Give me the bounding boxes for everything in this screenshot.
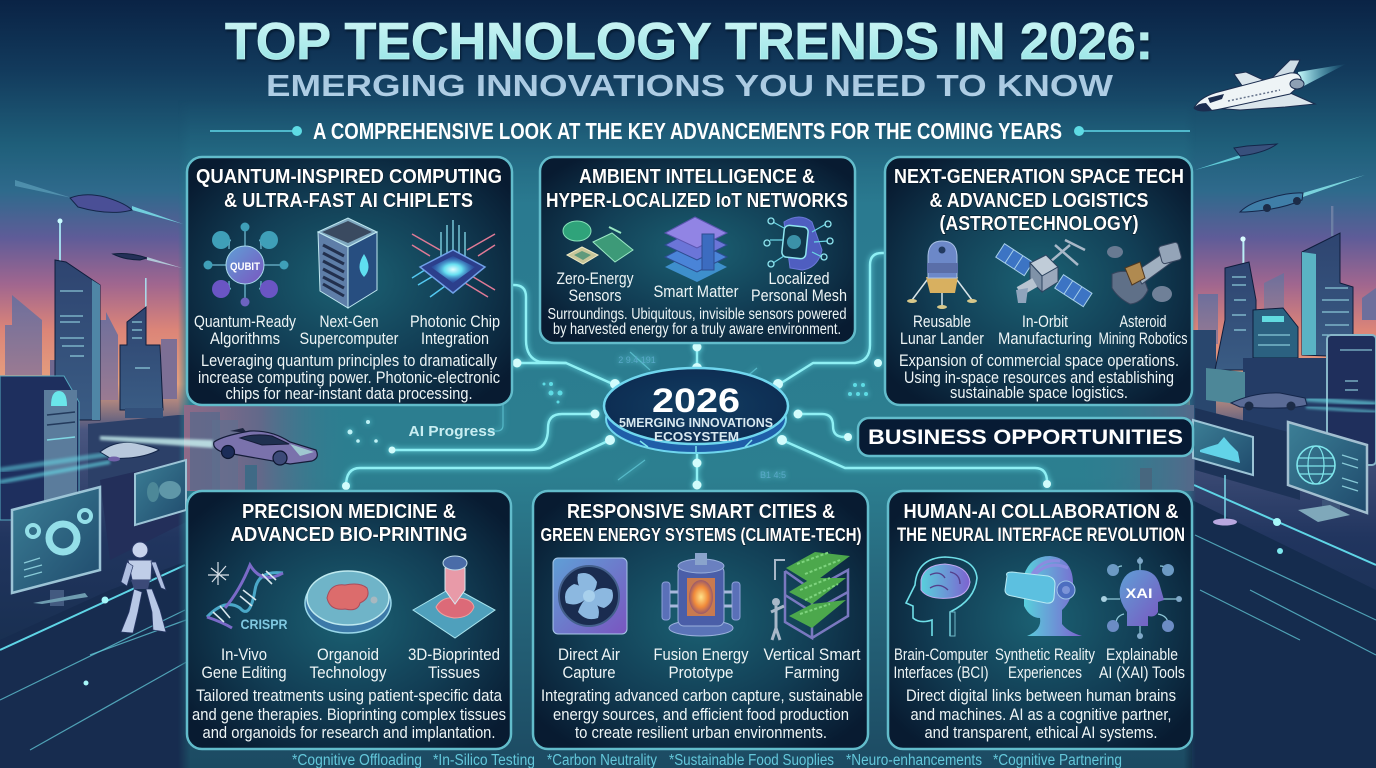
description bbox=[548, 306, 846, 338]
heading: QUANTUM-INSPIRED COMPUTING bbox=[196, 165, 502, 188]
heading: & ADVANCED LOGISTICS bbox=[930, 189, 1148, 212]
city glimpse between left panels bbox=[184, 405, 354, 491]
icon labels bbox=[194, 313, 500, 348]
icon labels: Experiences bbox=[1008, 664, 1082, 682]
description: Direct digital links between human brains bbox=[906, 687, 1176, 705]
description: and transparent, ethical AI systems. bbox=[924, 724, 1158, 742]
heading: RESPONSIVE SMART CITIES & bbox=[567, 500, 835, 523]
flying car left bbox=[15, 180, 183, 224]
business opportunities banner bbox=[858, 418, 1193, 456]
monitor with gears bbox=[12, 487, 100, 606]
heading bbox=[196, 165, 502, 212]
icon labels: Reusable bbox=[913, 313, 971, 331]
description bbox=[899, 352, 1179, 402]
title line 1: TOP TECHNOLOGY TRENDS IN 2026: bbox=[225, 13, 1153, 71]
icon: DNA CRISPR bbox=[207, 562, 288, 632]
icon: qubit network bbox=[204, 222, 288, 306]
icon labels bbox=[894, 646, 1185, 682]
panel: smart cities bbox=[533, 491, 868, 749]
central hub bbox=[604, 368, 788, 453]
description bbox=[192, 687, 506, 742]
small ship left bbox=[113, 254, 182, 268]
icon: asteroid mining robot bbox=[1107, 242, 1182, 304]
description: Expansion of commercial space operations. bbox=[899, 352, 1179, 370]
heading bbox=[546, 165, 848, 212]
heading bbox=[540, 500, 862, 545]
heading: GREEN ENERGY SYSTEMS (CLIMATE-TECH) bbox=[540, 525, 862, 545]
icon labels: Localized bbox=[768, 270, 830, 288]
description: Integrating advanced carbon capture, sustainable bbox=[541, 687, 863, 705]
icon labels: Zero-Energy bbox=[556, 270, 634, 288]
description: sustainable space logistics. bbox=[950, 384, 1128, 402]
icon labels: Tissues bbox=[428, 664, 480, 682]
hover car left bbox=[100, 442, 159, 462]
icon labels bbox=[202, 646, 500, 682]
tagline with connector dots: A COMPREHENSIVE LOOK AT THE KEY ADVANCEMENTS FOR THE COMING YEARS bbox=[313, 118, 1062, 144]
icon labels bbox=[558, 646, 861, 682]
icon: VR headset bbox=[1005, 556, 1082, 636]
description: by harvested energy for a truly aware environment. bbox=[553, 321, 841, 338]
flying ship right bbox=[1195, 144, 1277, 170]
description bbox=[541, 687, 863, 742]
icon: brain-computer interface bbox=[906, 557, 977, 636]
icon: in-orbit manufacturing bbox=[996, 240, 1092, 307]
circuit traces bbox=[342, 253, 1051, 490]
hub caption line 2: ECOSYSTEM bbox=[654, 429, 739, 444]
icon labels: Farming bbox=[784, 664, 840, 682]
circuit traces: B1 4:5 bbox=[760, 470, 786, 480]
icon labels: Capture bbox=[562, 664, 616, 682]
circuit traces: 2 9.4 191 bbox=[618, 355, 656, 365]
icon labels: Lunar Lander bbox=[900, 330, 984, 348]
icon labels bbox=[556, 270, 847, 305]
icon labels: Interfaces (BCI) bbox=[894, 664, 988, 682]
heading: ADVANCED BIO-PRINTING bbox=[230, 523, 468, 546]
title bbox=[225, 13, 1153, 103]
icon labels: Brain-Computer bbox=[894, 646, 988, 664]
icon labels: Gene Editing bbox=[202, 664, 286, 682]
heading: THE NEURAL INTERFACE REVOLUTION bbox=[897, 525, 1185, 546]
icon: explainable AI: XAI bbox=[1126, 585, 1152, 601]
icon: photonic chip bbox=[412, 220, 495, 297]
icon: vertical farming bbox=[771, 552, 850, 640]
description: to create resilient urban environments. bbox=[575, 724, 827, 742]
icon labels: Asteroid bbox=[1120, 313, 1166, 331]
heading: (ASTROTECHNOLOGY) bbox=[940, 212, 1138, 235]
icon: explainable AI bbox=[1101, 557, 1182, 639]
icon labels: Mining Robotics bbox=[1098, 330, 1188, 348]
heading bbox=[897, 500, 1185, 546]
heading: HUMAN-AI COLLABORATION & bbox=[904, 500, 1179, 523]
monitor small left bbox=[135, 460, 186, 525]
center teal field bbox=[178, 100, 1196, 768]
icon labels: Technology bbox=[310, 664, 387, 682]
icon labels: Algorithms bbox=[210, 330, 280, 348]
icon: qubit network: QUBIT bbox=[230, 261, 260, 273]
heading: HYPER-LOCALIZED IoT NETWORKS bbox=[546, 189, 848, 212]
purple sports car with light trail bbox=[100, 428, 317, 465]
icon: lunar lander bbox=[907, 241, 977, 309]
heading bbox=[894, 165, 1184, 235]
description: Surroundings. Ubiquitous, invisible sensors powered bbox=[548, 306, 846, 323]
icon: smart matter bbox=[665, 217, 727, 282]
hub year: 2026 bbox=[652, 382, 740, 420]
description bbox=[198, 352, 500, 403]
icon: zero-energy sensors bbox=[563, 221, 633, 264]
icon labels: AI (XAI) Tools bbox=[1099, 664, 1185, 682]
icon labels: Quantum-Ready bbox=[194, 313, 297, 331]
space shuttle bbox=[1194, 60, 1346, 111]
flying car right bbox=[1240, 175, 1365, 212]
heading: & ULTRA-FAST AI CHIPLETS bbox=[224, 189, 473, 212]
icon labels: Supercomputer bbox=[300, 330, 399, 348]
panel: human-AI collaboration bbox=[888, 491, 1192, 749]
icon labels: Explainable bbox=[1106, 646, 1178, 664]
description: and gene therapies. Bioprinting complex tissues bbox=[192, 706, 506, 724]
icon: direct air capture fan bbox=[553, 558, 627, 634]
footer keywords bbox=[292, 752, 1122, 768]
icon labels: Smart Matter bbox=[654, 283, 739, 301]
description: energy sources, and efficient food production bbox=[553, 706, 849, 724]
icon labels: Vertical Smart bbox=[764, 646, 861, 664]
icon labels: 3D-Bioprinted bbox=[408, 646, 500, 664]
monitor with globe bbox=[1288, 422, 1367, 522]
heading: AMBIENT INTELLIGENCE & bbox=[579, 165, 815, 188]
icon labels: Manufacturing bbox=[998, 330, 1092, 348]
hub caption: 5MERGING INNOVATIONS bbox=[619, 415, 773, 430]
description: Using in-space resources and establishing bbox=[904, 369, 1174, 387]
panel: quantum computing bbox=[187, 157, 512, 405]
icon labels: Photonic Chip bbox=[410, 313, 500, 331]
heading: NEXT-GENERATION SPACE TECH bbox=[894, 165, 1184, 188]
icon: personal mesh watch bbox=[764, 217, 833, 270]
icon labels: Integration bbox=[421, 330, 489, 348]
description bbox=[906, 687, 1176, 742]
panel: ambient intelligence bbox=[540, 157, 855, 343]
description: and machines. AI as a cognitive partner, bbox=[910, 706, 1172, 724]
description: increase computing power. Photonic-electronic bbox=[198, 369, 500, 387]
left city skyline bbox=[0, 218, 190, 560]
right city skyline bbox=[1190, 206, 1376, 500]
icon: organoid dish bbox=[305, 571, 391, 633]
robot bbox=[121, 542, 166, 633]
description: Tailored treatments using patient-specific data bbox=[196, 687, 503, 705]
description: Leveraging quantum principles to dramatically bbox=[201, 352, 498, 370]
icon labels: Direct Air bbox=[558, 646, 620, 664]
icon labels: In-Vivo bbox=[221, 646, 267, 664]
monitor with chart bbox=[1193, 420, 1253, 526]
AI progress label: AI Progress bbox=[408, 423, 496, 440]
description: chips for near-instant data processing. bbox=[226, 385, 472, 403]
icon labels: Next-Gen bbox=[320, 313, 378, 331]
heading bbox=[230, 500, 468, 546]
icon labels: In-Orbit bbox=[1022, 313, 1068, 331]
heading: PRECISION MEDICINE & bbox=[242, 500, 456, 523]
city glimpse between right panels bbox=[1070, 405, 1194, 491]
icon: DNA CRISPR: CRISPR bbox=[240, 616, 288, 632]
description: and organoids for research and implantation. bbox=[202, 724, 496, 742]
title line 2: EMERGING INNOVATIONS YOU NEED TO KNOW bbox=[266, 68, 1114, 103]
icon: fusion reactor bbox=[662, 553, 740, 636]
hover car right bbox=[1231, 393, 1307, 410]
panel: space tech bbox=[885, 157, 1192, 405]
icon labels: Prototype bbox=[668, 664, 734, 682]
icon labels: Sensors bbox=[568, 287, 622, 305]
icon labels: Personal Mesh bbox=[751, 287, 847, 305]
icon labels: Organoid bbox=[317, 646, 379, 664]
icon labels: Fusion Energy bbox=[654, 646, 749, 664]
icon: supercomputer bbox=[318, 218, 377, 308]
icon labels bbox=[900, 313, 1188, 348]
panel: precision medicine bbox=[187, 491, 511, 749]
business opportunities banner: BUSINESS OPPORTUNITIES bbox=[868, 426, 1183, 449]
icon labels: Synthetic Reality bbox=[995, 646, 1096, 664]
ground and light lines bbox=[0, 399, 1376, 768]
icon: bioprinter bbox=[413, 556, 495, 638]
